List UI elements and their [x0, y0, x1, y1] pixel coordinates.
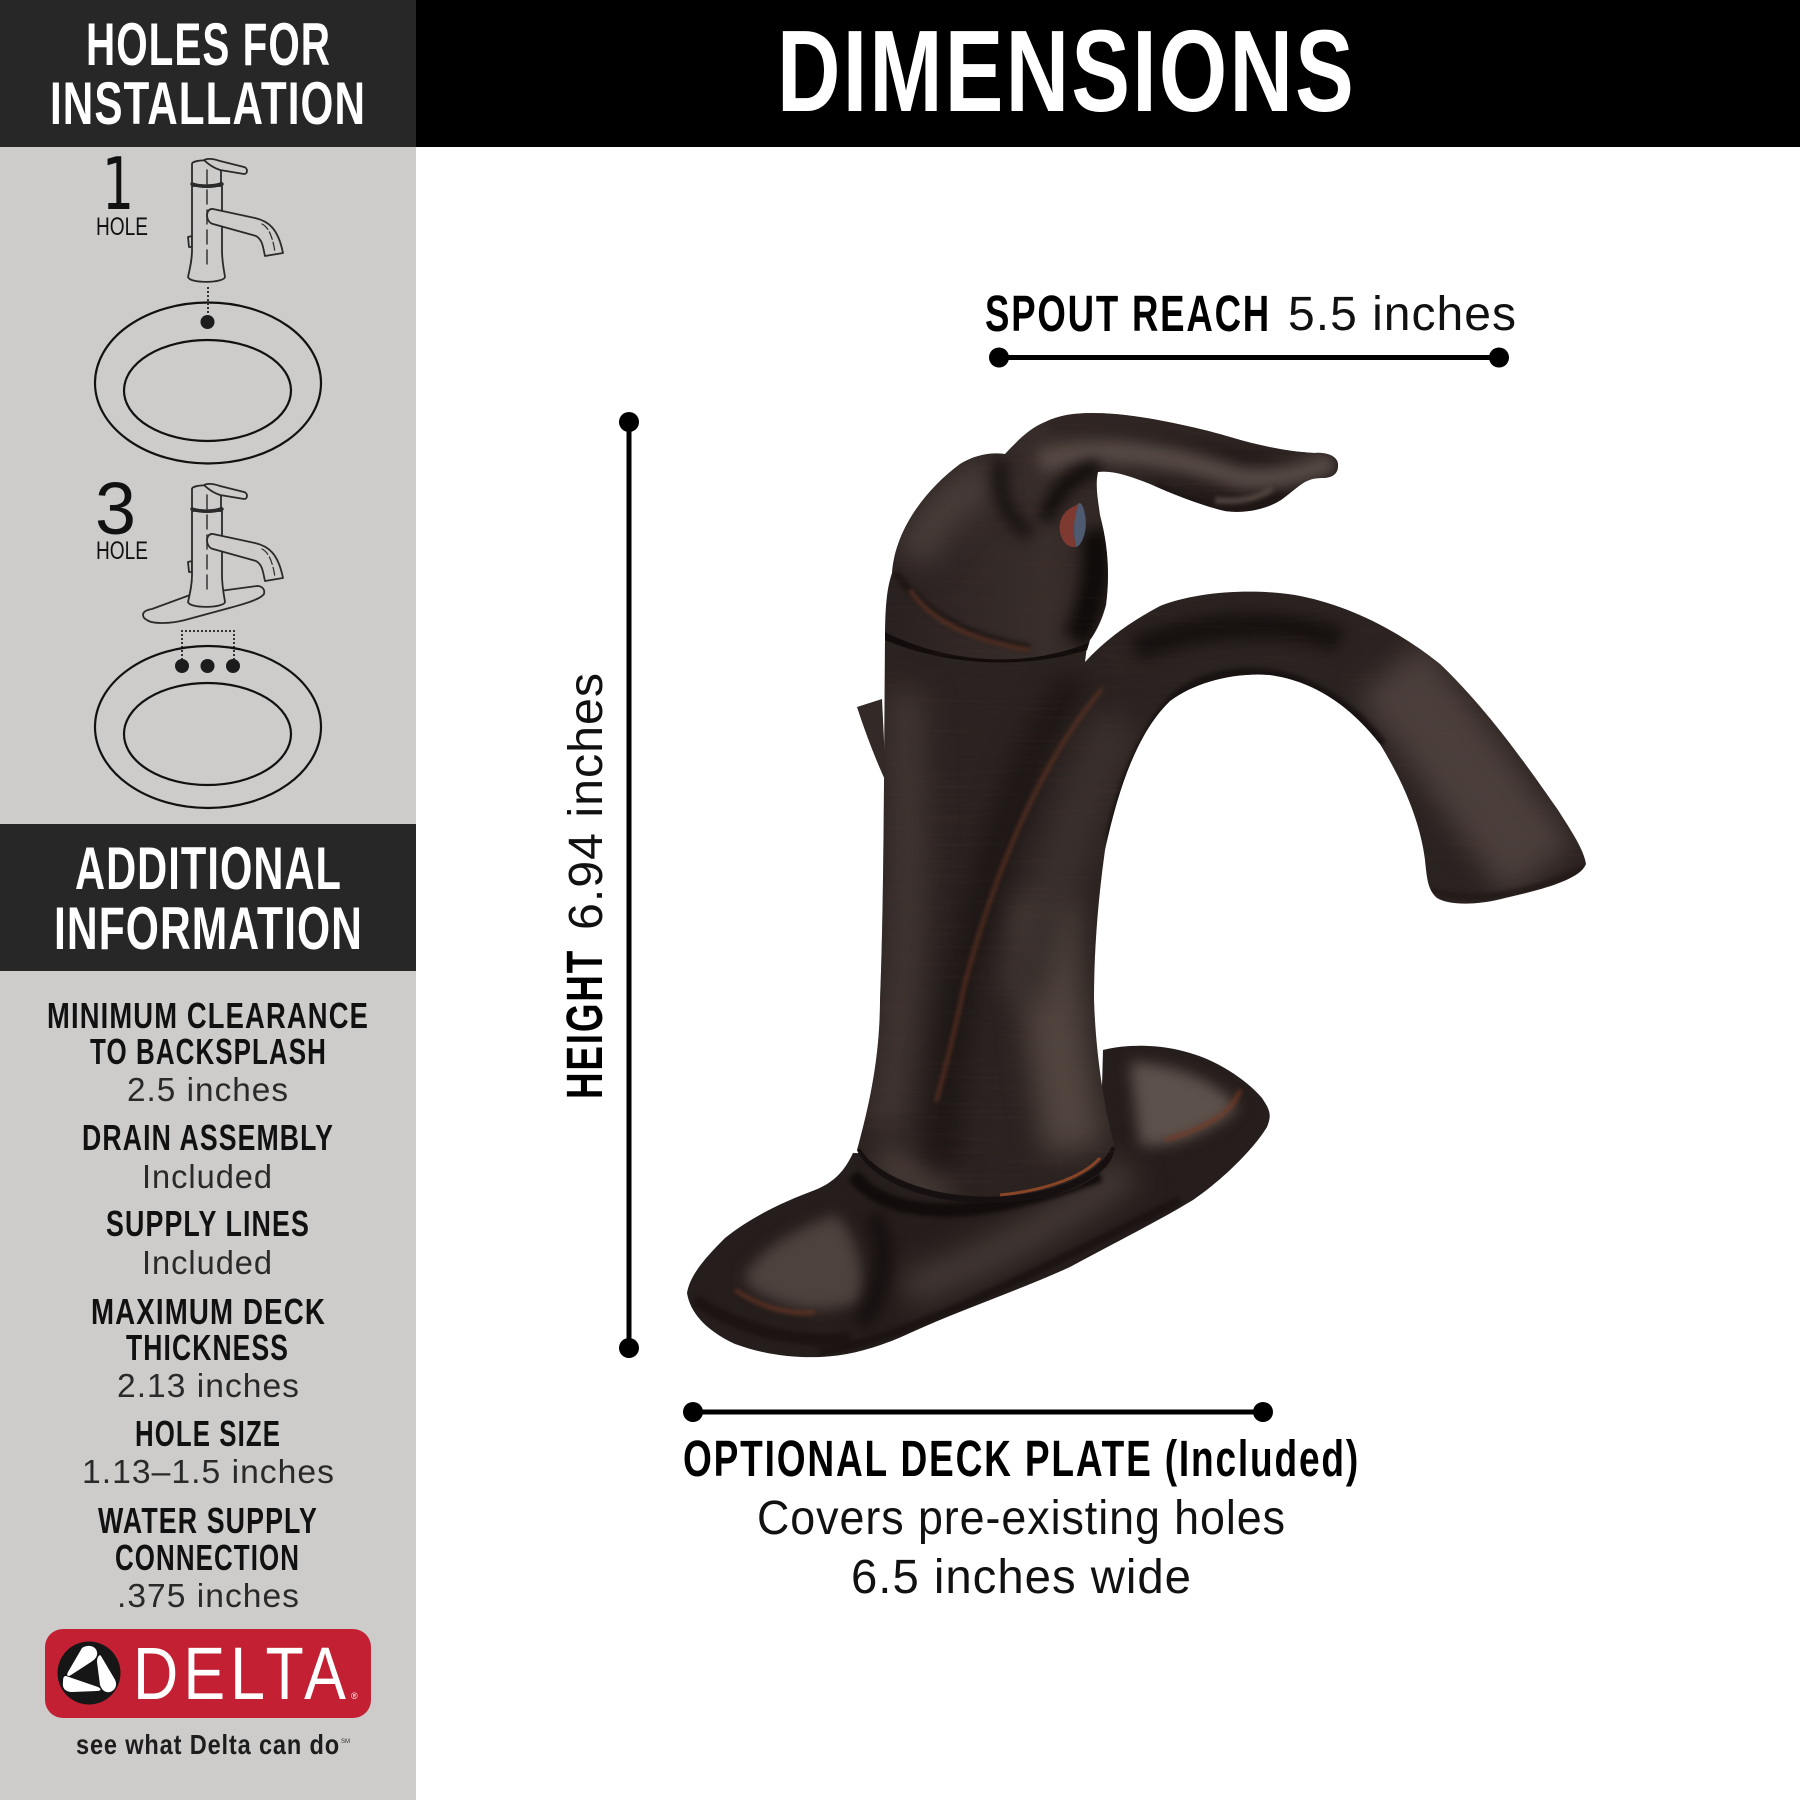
faucet handle and dome: [885, 413, 1338, 662]
deck plate: [687, 1046, 1270, 1358]
icon: delta emblem: [58, 1642, 120, 1704]
text block: additional information list: WATER SUPPLY: [98, 1500, 318, 1541]
label: height: [556, 672, 613, 1099]
pop-up lever: [857, 699, 886, 782]
text block: additional information list: 2.5 inches: [127, 1071, 289, 1108]
dimension line: deck plate: [683, 1402, 1273, 1422]
hot and cold indicator: [1060, 503, 1086, 547]
heading band: additional information: INFORMATION: [54, 895, 363, 962]
label: height: HEIGHT: [556, 949, 613, 1099]
text block: optional deck plate: OPTIONAL DECK PLATE (Included): [683, 1430, 1360, 1487]
diagram: 3 hole installation: [95, 467, 321, 808]
heading band: additional information: [0, 824, 416, 971]
text block: additional information list: TO BACKSPLASH: [90, 1031, 327, 1072]
text block: additional information list: Included: [142, 1244, 273, 1281]
text block: additional information list: DRAIN ASSEMBLY: [82, 1117, 334, 1158]
text block: additional information list: MAXIMUM DECK: [91, 1291, 326, 1332]
text block: optional deck plate: [683, 1430, 1360, 1604]
heading band: holes for installation: INSTALLATION: [50, 70, 366, 137]
panel: sidebar: [0, 0, 416, 1800]
text block: additional information list: [47, 995, 369, 1614]
faucet body and spout: [850, 580, 1610, 1220]
text block: additional information list: HOLE SIZE: [135, 1413, 281, 1454]
text block: additional information list: 1.13–1.5 inches: [82, 1453, 335, 1490]
text block: optional deck plate: 6.5 inches wide: [851, 1551, 1192, 1604]
diagram: 3 hole installation: 3: [95, 467, 136, 550]
text block: additional information list: CONNECTION: [115, 1537, 300, 1578]
label: spout reach: 5.5 inches: [1288, 288, 1517, 341]
heading band: dimensions: DIMENSIONS: [777, 6, 1356, 136]
heading band: holes for installation: [0, 0, 416, 147]
diagram: 1 hole installation: HOLE: [96, 213, 148, 241]
diagram: 1 hole installation: 1: [102, 142, 134, 226]
label: spout reach: SPOUT REACH: [985, 285, 1271, 342]
tagline: see what Delta can do: [76, 1729, 340, 1760]
heading band: dimensions: [416, 0, 1800, 147]
text block: optional deck plate: Covers pre-existing holes: [757, 1492, 1286, 1545]
text block: additional information list: Included: [142, 1158, 273, 1195]
heading band: holes for installation: HOLES FOR: [86, 11, 331, 78]
diagram: 1 hole installation: [95, 142, 321, 464]
diagram: 3 hole installation: HOLE: [96, 537, 148, 565]
label: height: 6.94 inches: [560, 672, 613, 930]
text block: additional information list: 2.13 inches: [117, 1367, 300, 1404]
text block: additional information list: .375 inches: [117, 1577, 300, 1614]
heading band: additional information: ADDITIONAL: [75, 835, 342, 902]
text block: additional information list: SUPPLY LINES: [106, 1203, 310, 1244]
dimension line: height: [619, 412, 639, 1358]
logo: Delta: ®: [351, 1691, 358, 1701]
illustration: venetian bronze faucet: [680, 410, 1610, 1370]
tagline: SM: [341, 1739, 350, 1745]
logo: Delta: [45, 1629, 371, 1718]
text block: additional information list: MINIMUM CLEARANCE: [47, 995, 369, 1036]
dimension line: spout reach: [989, 348, 1509, 368]
logo: Delta: DELTA: [133, 1632, 351, 1715]
text block: additional information list: THICKNESS: [126, 1327, 289, 1368]
